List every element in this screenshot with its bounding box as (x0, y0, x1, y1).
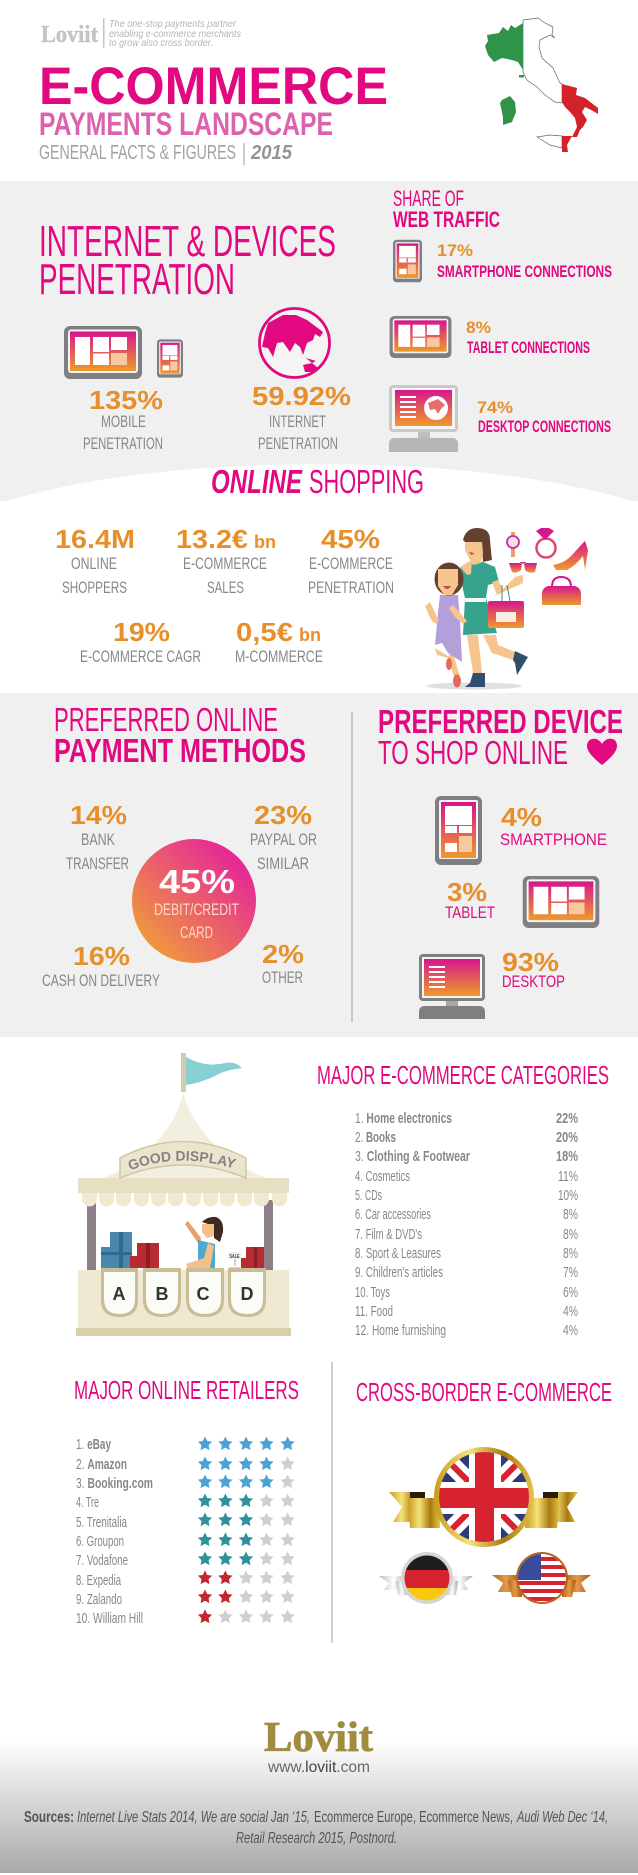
list: categories: 7% (563, 1264, 578, 1281)
list: retailers: 9. Zalando (76, 1591, 122, 1608)
shield labels A B C D: D (240, 1284, 254, 1304)
stat: e-commerce penetration: E-COMMERCE (309, 554, 393, 573)
heading: internet and devices: INTERNET & DEVICES (39, 217, 336, 266)
stat: m-commerce: 0,5€ (236, 617, 293, 647)
stat: desktop: 93% (502, 947, 559, 977)
stat: tablet connections (466, 318, 590, 357)
stat: paypal or similar: SIMILAR (257, 854, 309, 873)
tagline: The one-stop payments partner (109, 19, 237, 30)
list: categories: 8% (563, 1226, 578, 1243)
stat: online shoppers: ONLINE (71, 554, 117, 573)
list: categories: 8. Sport & Leasures (355, 1245, 441, 1262)
stat: bank transfer: TRANSFER (66, 854, 129, 873)
list: categories: 8% (563, 1245, 578, 1262)
star ratings (198, 1436, 295, 1623)
sources: Sources: (24, 1809, 74, 1826)
list: categories: 3. Clothing & Footwear (355, 1148, 470, 1165)
stat: paypal or similar (250, 800, 317, 873)
heading: share of web traffic: SHARE OF (393, 186, 464, 211)
stat: tablet: TABLET (445, 903, 495, 922)
icon: globe (260, 308, 330, 378)
sign: good display (119, 1140, 247, 1179)
stat: internet penetration (252, 381, 351, 453)
panel: major e-commerce categories (317, 1060, 609, 1339)
tagline: general facts: GENERAL FACTS & FIGURES (39, 142, 236, 164)
heading: share of web traffic: WEB TRAFFIC (393, 207, 500, 232)
icon: smartphone connections (393, 240, 422, 282)
title: E-COMMERCE (39, 57, 388, 116)
stat: e-commerce sales (176, 524, 276, 597)
badge: United States (492, 1552, 591, 1605)
stat circle: debit/credit card (132, 839, 256, 963)
heading: internet and devices (39, 217, 336, 304)
stat: e-commerce penetration: 45% (321, 524, 380, 554)
stat: tablet connections: 8% (466, 318, 491, 337)
icon: ring (536, 528, 556, 558)
sources: Internet Live Stats 2014, We are social Jan ‘15, (77, 1809, 310, 1826)
heading: preferred online payment methods (54, 701, 306, 769)
stat: desktop connections: 74% (477, 398, 513, 417)
icon: smartphone (435, 796, 482, 865)
icon: desktop connections (389, 385, 458, 452)
icon: tablet and phone (64, 326, 183, 379)
list: categories: 6. Car accessories (355, 1206, 431, 1223)
stat: mobile penetration (83, 385, 163, 453)
stat: tablet (445, 877, 495, 922)
stat: e-commerce penetration (308, 524, 394, 597)
list: categories: 12. Home furnishing (355, 1322, 446, 1339)
list: categories: 22% (556, 1110, 578, 1127)
list: retailers: 2. Amazon (76, 1456, 127, 1473)
stat: mobile penetration: 135% (89, 385, 163, 415)
list: categories: 11. Food (355, 1303, 393, 1320)
heading: online shopping: ONLINE (211, 463, 303, 500)
stat: e-commerce CAGR (80, 617, 201, 666)
illustration: mother and daughter shopping (425, 528, 528, 690)
list: categories: 4% (563, 1322, 578, 1339)
list: retailers: 3. Booking.com (76, 1475, 153, 1492)
icon: heart (587, 739, 617, 765)
panel: preferred payment methods and device (0, 693, 638, 1037)
stat: paypal or similar: PAYPAL OR (250, 830, 317, 849)
stat circle: debit/credit card: CARD (180, 923, 213, 942)
stat: internet penetration: INTERNET (269, 412, 326, 431)
panel: cross-border e-commerce (356, 1377, 612, 1605)
icon: watch (507, 532, 519, 557)
stat: mobile penetration: MOBILE (101, 412, 146, 431)
stat: other (262, 939, 304, 987)
badge: United Kingdom (389, 1447, 578, 1547)
panel: footer (0, 1715, 638, 1873)
list: categories: 4% (563, 1303, 578, 1320)
stat: desktop (502, 947, 565, 991)
stat circle: debit/credit card: DEBIT/CREDIT (154, 900, 239, 919)
panel: online shopping (0, 463, 638, 693)
badge: Germany (379, 1552, 473, 1604)
stat: bank transfer: BANK (81, 830, 115, 849)
list: retailers: 8. Expedia (76, 1572, 121, 1589)
heading: preferred online payment methods: PREFERRED ONLINE (54, 701, 278, 738)
sources (24, 1809, 608, 1847)
sources: Retail Research 2015, Postnord. (236, 1830, 397, 1847)
heading: online shopping (211, 463, 424, 500)
stat: smartphone: SMARTPHONE (500, 830, 607, 849)
stat: other: OTHER (262, 968, 303, 987)
icon: handbag (542, 577, 581, 605)
list: categories: 18% (556, 1148, 578, 1165)
stat: other: 2% (262, 939, 304, 969)
list: categories: 7. Film & DVD's (355, 1226, 422, 1243)
panel: header (39, 18, 598, 165)
icon: tablet (523, 876, 599, 928)
list: retailers: 7. Vodafone (76, 1552, 128, 1569)
tagline: enabling e-commerce merchants (109, 29, 241, 40)
gift boxes (101, 1232, 264, 1268)
list: categories: 11% (558, 1168, 578, 1185)
stat: online shoppers: 16.4M (55, 524, 135, 554)
list: retailers: 5. Trenitalia (76, 1514, 127, 1531)
stat: desktop: DESKTOP (502, 972, 565, 991)
heading: retailers: MAJOR ONLINE RETAILERS (74, 1375, 299, 1405)
stat: bank transfer (66, 800, 129, 873)
heading: preferred device to shop online (378, 703, 623, 771)
stat: desktop connections (477, 398, 611, 436)
list: categories: 9. Children's articles (355, 1264, 443, 1281)
icon: tablet connections (390, 316, 451, 358)
illustration: market stall (76, 1053, 291, 1336)
heading: online shopping: SHOPPING (309, 463, 424, 500)
stat: smartphone: 4% (501, 802, 542, 832)
shield labels A B C D: B (156, 1284, 168, 1304)
list: categories: 4. Cosmetics (355, 1168, 410, 1185)
stat: online shoppers: SHOPPERS (62, 578, 127, 597)
website: www.loviit.com (267, 1759, 370, 1776)
icon: map of Italy in flag colours (485, 18, 598, 152)
heading: share of web traffic (393, 186, 500, 232)
stat: e-commerce sales: 13.2€ (176, 524, 248, 554)
shield labels A B C D: C (196, 1284, 210, 1304)
stat: e-commerce penetration: PENETRATION (308, 578, 394, 597)
stat: tablet: 3% (447, 877, 487, 907)
list: categories: 2. Books (355, 1129, 396, 1146)
list: categories: 6% (563, 1284, 578, 1301)
list: categories: 10% (558, 1187, 578, 1204)
stat circle: debit/credit card: 45% (159, 863, 235, 900)
shield labels A B C D: A (112, 1284, 126, 1304)
stat: smartphone connections: 17% (437, 241, 473, 260)
stat: internet penetration: PENETRATION (258, 434, 338, 453)
heading: preferred online payment methods: PAYMENT METHODS (54, 732, 306, 769)
list: categories: 5. CDs (355, 1187, 382, 1204)
list: categories: 1. Home electronics (355, 1110, 452, 1127)
tagline: to grow also cross border. (109, 38, 213, 49)
icon: sunglasses (509, 562, 537, 573)
logo: Loviit gold: Loviit (264, 1715, 373, 1761)
list: retailers: 6. Groupon (76, 1533, 124, 1550)
stat: smartphone connections (437, 241, 612, 281)
stat: cash on delivery: CASH ON DELIVERY (42, 971, 160, 990)
stat: e-commerce sales: bn (254, 532, 276, 552)
logo: Loviit grey: Loviit (41, 22, 98, 48)
list: retailers: 4. Tre (76, 1494, 99, 1511)
stat: e-commerce sales: SALES (207, 578, 244, 597)
stat: e-commerce sales: E-COMMERCE (183, 554, 267, 573)
tagline (103, 18, 241, 49)
stat: e-commerce CAGR: E-COMMERCE CAGR (80, 647, 201, 666)
shop assistant (185, 1217, 223, 1269)
stat: online shoppers (55, 524, 135, 597)
stat: m-commerce: bn (299, 625, 321, 645)
stat: e-commerce CAGR: 19% (113, 617, 170, 647)
list: categories: 8% (563, 1206, 578, 1223)
sale sign (228, 1252, 241, 1268)
stat: internet penetration: 59.92% (252, 381, 351, 411)
panel: internet and devices penetration (0, 181, 638, 501)
heading: internet and devices: PENETRATION (39, 255, 235, 304)
stat: cash on delivery: 16% (73, 941, 130, 971)
sources: Ecommerce Europe, Ecommerce News, (314, 1809, 513, 1826)
list: retailers (76, 1436, 153, 1627)
list: categories (355, 1110, 578, 1339)
sale sign: SALE (230, 1254, 240, 1260)
list: retailers: 1. eBay (76, 1436, 111, 1453)
tagline: general facts: 2015 (250, 142, 293, 164)
icon: high-heel shoe (553, 541, 588, 570)
stat: mobile penetration: PENETRATION (83, 434, 163, 453)
list: categories: 10. Toys (355, 1284, 390, 1301)
list: categories: 20% (556, 1129, 578, 1146)
shield labels A B C D (101, 1268, 266, 1317)
icon: desktop (419, 954, 485, 1019)
stat: m-commerce: M-COMMERCE (235, 647, 323, 666)
panel: major online retailers (74, 1375, 299, 1627)
stat: paypal or similar: 23% (254, 800, 312, 830)
stat: m-commerce (235, 617, 323, 666)
stat: smartphone (500, 802, 607, 849)
stat: bank transfer: 14% (70, 800, 127, 830)
stat: cash on delivery (42, 941, 160, 990)
sign: good display: GOOD DISPLAY (128, 1151, 236, 1170)
flag (181, 1053, 242, 1092)
list: retailers: 10. William Hill (76, 1610, 143, 1627)
subtitle: PAYMENTS LANDSCAPE (39, 106, 333, 142)
